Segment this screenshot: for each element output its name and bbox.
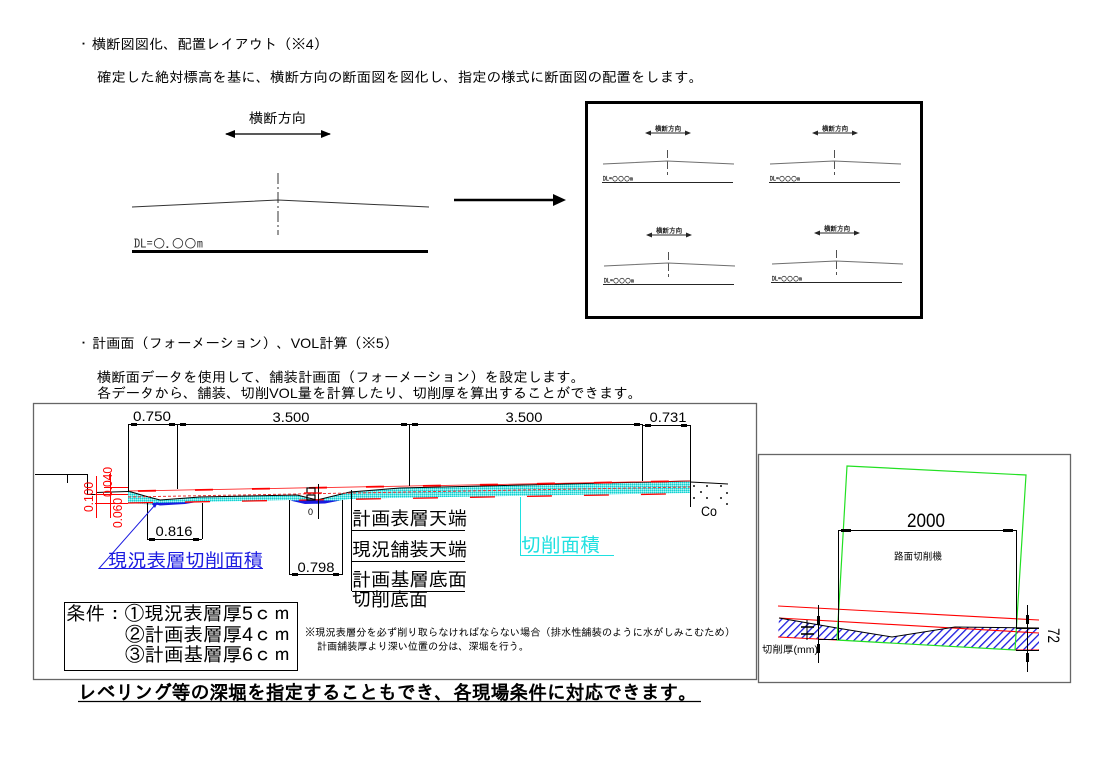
dimension: 0.798: 0.798 xyxy=(298,559,335,575)
label: 計画表層天端: 計画表層天端 xyxy=(352,509,467,530)
small cross section 2: 横断方向 xyxy=(821,124,848,133)
callout: 現況表層切削面積: 現況表層切削面積 xyxy=(108,551,263,572)
callout: 現況表層切削面積 xyxy=(99,502,263,572)
small cross section 3: 横断方向 xyxy=(655,226,682,235)
dimension: 72 xyxy=(1016,605,1063,672)
conditions box: ③計画基層厚6ｃｍ xyxy=(125,644,292,666)
road surface lines xyxy=(778,606,1039,650)
panel: layout sheet xyxy=(586,102,922,318)
small cross section 1 xyxy=(602,124,734,182)
concrete edge (Co) xyxy=(690,482,728,519)
small cross section 1: DL=○○○m xyxy=(603,174,634,182)
diagram: cross section xyxy=(132,110,429,252)
left edge: red thickness dimensions: 0.040 xyxy=(101,467,115,497)
left edge: kerb outline xyxy=(35,474,128,494)
label: 現況舗装天端: 現況舗装天端 xyxy=(352,540,467,561)
center mark xyxy=(304,488,322,517)
conditions box xyxy=(64,602,298,670)
existing surface cut area (blue) xyxy=(150,500,340,506)
callout: 切削面積: 切削面積 xyxy=(521,535,600,557)
heading: section 1: 横断図図化、配置レイアウト（※4） xyxy=(92,36,328,52)
concrete edge (Co): Co xyxy=(701,504,717,519)
heading: section 2: 計画面（フォーメーション）、VOL計算（※5） xyxy=(92,335,398,351)
dimension: 3.500 left: 3.500 xyxy=(272,409,310,425)
small cross section 2: DL=○○○m xyxy=(770,174,801,182)
dimension: 0.731: 0.731 xyxy=(650,409,687,425)
dimension: 2000 xyxy=(838,511,1017,640)
machine outline xyxy=(837,466,1026,650)
diagram: cross section: DL=○.○○m xyxy=(134,237,203,250)
label: 切削底面: 切削底面 xyxy=(352,590,428,611)
diagram: cross section: 横断方向 xyxy=(249,110,306,126)
small cross section 1: 横断方向 xyxy=(654,124,681,133)
conditions box: ②計画表層厚4ｃｍ xyxy=(125,624,292,646)
small cross section 4: 横断方向 xyxy=(823,224,850,233)
note xyxy=(305,626,735,653)
surface and plan lines xyxy=(128,481,690,503)
dimension lines (top) xyxy=(128,424,690,591)
label: 計画基層底面: 計画基層底面 xyxy=(352,570,467,591)
callout: 切削面積 xyxy=(520,497,614,557)
dimension: 0.750: 0.750 xyxy=(133,408,171,424)
note: 計画舗装厚より深い位置の分は、深堀を行う。 xyxy=(317,640,529,653)
small cross section 2 xyxy=(769,124,901,182)
left edge: red thickness dimensions xyxy=(82,467,128,528)
small cross section 3 xyxy=(603,226,735,284)
dimension: 3.500 right: 3.500 xyxy=(506,409,543,425)
arrow: to layout xyxy=(454,194,566,206)
text: section 2 description line 2: 各データから、舗装、切削VOL量を計算したり、切削厚を算出することができます。 xyxy=(97,385,642,401)
hatched cut area xyxy=(778,618,1039,650)
dimension: cut thickness: 切削厚(mm) xyxy=(762,644,818,656)
dimension: 0.816: 0.816 xyxy=(156,523,193,539)
conditions box: 条件：①現況表層厚5ｃｍ xyxy=(66,603,292,625)
left edge: red thickness dimensions: 0.100 xyxy=(82,482,96,512)
heading: section 1: ･ xyxy=(80,36,87,52)
heading: section 2: ･ xyxy=(80,335,87,351)
left edge: red thickness dimensions: 0.060 xyxy=(111,498,125,528)
center mark: 0 xyxy=(308,507,313,517)
closing statement: レベリング等の深堀を指定することもでき、各現場条件に対応できます。 xyxy=(78,682,697,704)
small cross section 3: DL=○○○m xyxy=(604,276,635,284)
note: ※現況表層分を必ず削り取らなければならない場合（排水性舗装のように水がしみこむため） xyxy=(305,626,735,639)
label: 路面切削機: 路面切削機 xyxy=(894,551,942,563)
panel: cross section calculation xyxy=(34,404,756,680)
text: section 1 description: 確定した絶対標高を基に、横断方向の断面図を図化し、指定の様式に断面図の配置をします。 xyxy=(97,69,703,85)
dimension: 2000: 2000 xyxy=(907,511,945,532)
dimension ticks xyxy=(131,423,687,576)
small cross section 4 xyxy=(771,224,903,282)
cut area band xyxy=(128,481,690,505)
dimension: cut thickness xyxy=(762,605,837,663)
text: section 2 description line 1: 横断面データを使用して、舗装計画面（フォーメーション）を設定します。 xyxy=(97,369,585,385)
small cross section 4: DL=○○○m xyxy=(772,274,803,282)
dimension: 72: 72 xyxy=(1044,628,1063,643)
panel: cutting machine detail xyxy=(758,454,1070,682)
